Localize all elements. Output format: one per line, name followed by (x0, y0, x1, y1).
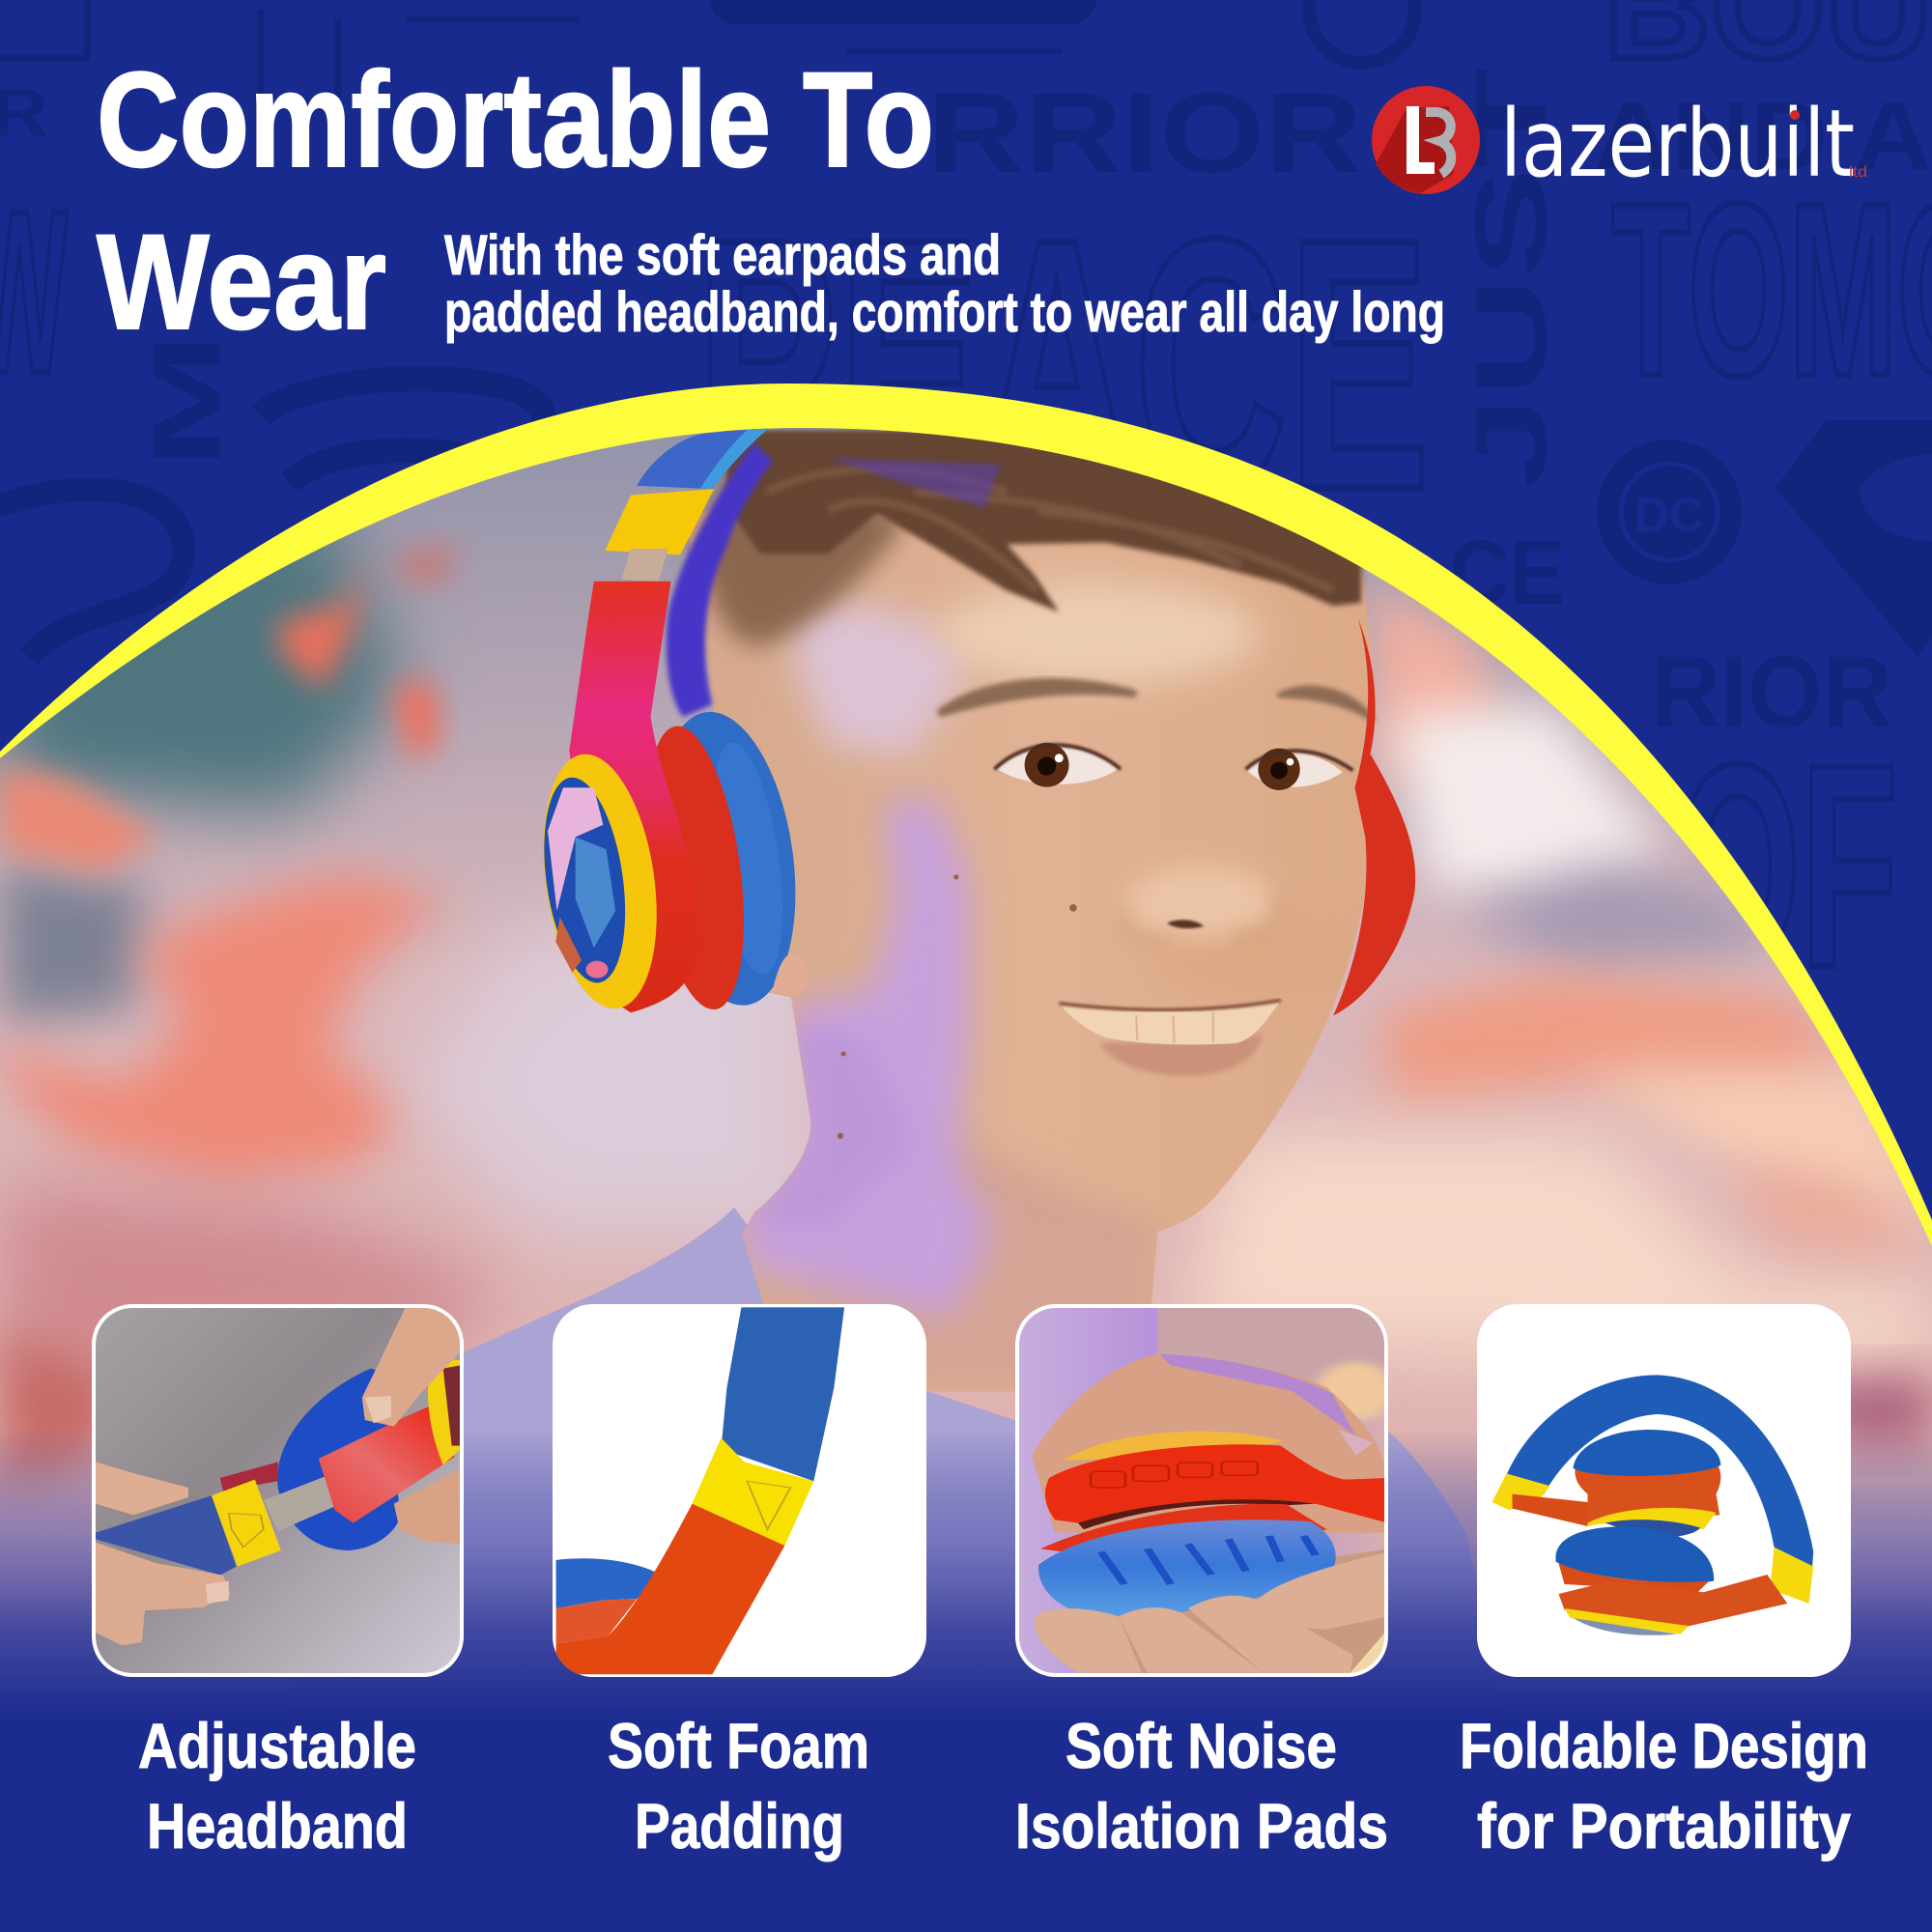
background lettering pattern: AND A (1594, 82, 1932, 190)
blue ear pad (277, 1369, 401, 1550)
metal slider (264, 1472, 345, 1531)
logo badge (1372, 86, 1480, 194)
bottom navy band (0, 1718, 1932, 1932)
photo panel: boy with headphones in sunset sky (0, 367, 1932, 1739)
lower ear cup stack (1556, 1526, 1787, 1635)
orange arm (556, 1504, 784, 1674)
eyebrows (939, 682, 1136, 714)
blue padded band (721, 1307, 844, 1481)
background lettering pattern: JUST (1455, 68, 1568, 488)
boy (528, 427, 1415, 1391)
fingers (1035, 1552, 1388, 1673)
metal slider (622, 549, 668, 582)
sunset sky (0, 428, 1932, 1625)
yellow ring (528, 747, 671, 1016)
red cup with buttons (1045, 1444, 1388, 1523)
upper arm (1513, 1494, 1587, 1526)
card: soft noise isolation pads (1014, 1304, 1397, 1681)
label: foldable design for portability: for Portability (1477, 1790, 1851, 1861)
upper yellow clip (1492, 1473, 1550, 1510)
shirt (464, 1208, 1477, 1605)
blue cushion (1038, 1520, 1336, 1620)
wordmark: lazerbuilt (1500, 90, 1855, 198)
subtitle: padded headband, comfort to wear all day long (444, 281, 1445, 344)
nose shadow (1167, 920, 1204, 928)
hand left upper (96, 1462, 188, 1515)
card: soft foam padding (553, 1304, 926, 1677)
subtitle (444, 224, 1445, 344)
label: soft foam padding (608, 1710, 869, 1861)
title (97, 43, 934, 357)
eye: right (1246, 749, 1353, 790)
background lettering pattern: DC (1634, 488, 1704, 542)
label: soft noise isolation pads: Isolation Pads (1015, 1790, 1388, 1861)
background lettering pattern: RRIOR (927, 70, 1362, 197)
yellow clip (692, 1437, 813, 1546)
mouth (1059, 1000, 1281, 1076)
subtitle: With the soft earpads and (444, 224, 1001, 287)
right ear cup (1333, 618, 1415, 1015)
card: adjustable headband (87, 1304, 469, 1681)
label: foldable design for portability (1460, 1710, 1868, 1861)
headband fabric (637, 427, 770, 489)
lower red cup (1040, 1504, 1327, 1565)
headband inner purple (667, 442, 773, 717)
neck shadow (921, 1157, 1148, 1385)
logo: lazerbuilt (1372, 86, 1867, 198)
yellow headband clip (605, 489, 714, 554)
upper ear cup stack (1573, 1430, 1720, 1537)
blue headband (1507, 1375, 1813, 1567)
label: soft foam padding: Padding (635, 1790, 844, 1861)
dark gap between cups (1078, 1499, 1316, 1529)
yellow clip (212, 1480, 281, 1567)
background lettering pattern: PEACE (696, 165, 1430, 564)
eye: left (994, 743, 1121, 787)
hand top right (362, 1307, 461, 1427)
card: foldable design (1477, 1304, 1851, 1677)
hair (696, 431, 1364, 645)
background lettering pattern: CE (1449, 522, 1565, 624)
label: soft foam padding: Soft Foam (608, 1710, 869, 1781)
ear lobe (773, 952, 808, 996)
cup artwork (532, 772, 637, 988)
label: adjustable headband (138, 1710, 416, 1861)
ltd mark: ltd (1849, 164, 1867, 181)
chest fade to navy (0, 1430, 1932, 1719)
hand left lower (96, 1543, 231, 1645)
background lettering pattern: M (133, 333, 242, 469)
head and neck (686, 495, 1372, 1391)
dark red arm behind (220, 1462, 278, 1491)
label: soft noise isolation pads: Soft Noise (1065, 1710, 1337, 1781)
label: adjustable headband: Headband (147, 1790, 408, 1861)
blue ear pad (556, 1558, 660, 1608)
yellow rim (428, 1357, 461, 1465)
blue fabric (96, 1495, 237, 1576)
background lettering pattern (0, 0, 1932, 1028)
moles (838, 874, 1077, 1139)
nose shading (1127, 866, 1275, 937)
ear pad and cup (632, 703, 812, 1015)
red arm (569, 582, 700, 1012)
wordmark dot (1790, 110, 1800, 120)
title: Comfortable To (97, 43, 934, 195)
hand back (1032, 1354, 1388, 1533)
lower palm (1037, 1548, 1388, 1673)
hand right lower (394, 1468, 461, 1544)
title: Wear (97, 206, 386, 357)
label: adjustable headband: Adjustable (138, 1710, 416, 1781)
lilac light on face and neck (742, 800, 994, 1318)
background lettering pattern: RIOR (1651, 636, 1892, 749)
yellow disc (1064, 1432, 1284, 1461)
label: soft noise isolation pads (1015, 1710, 1388, 1861)
sky inset (1157, 1304, 1389, 1410)
red arm (319, 1404, 455, 1523)
lower yellow clip (1770, 1548, 1813, 1604)
